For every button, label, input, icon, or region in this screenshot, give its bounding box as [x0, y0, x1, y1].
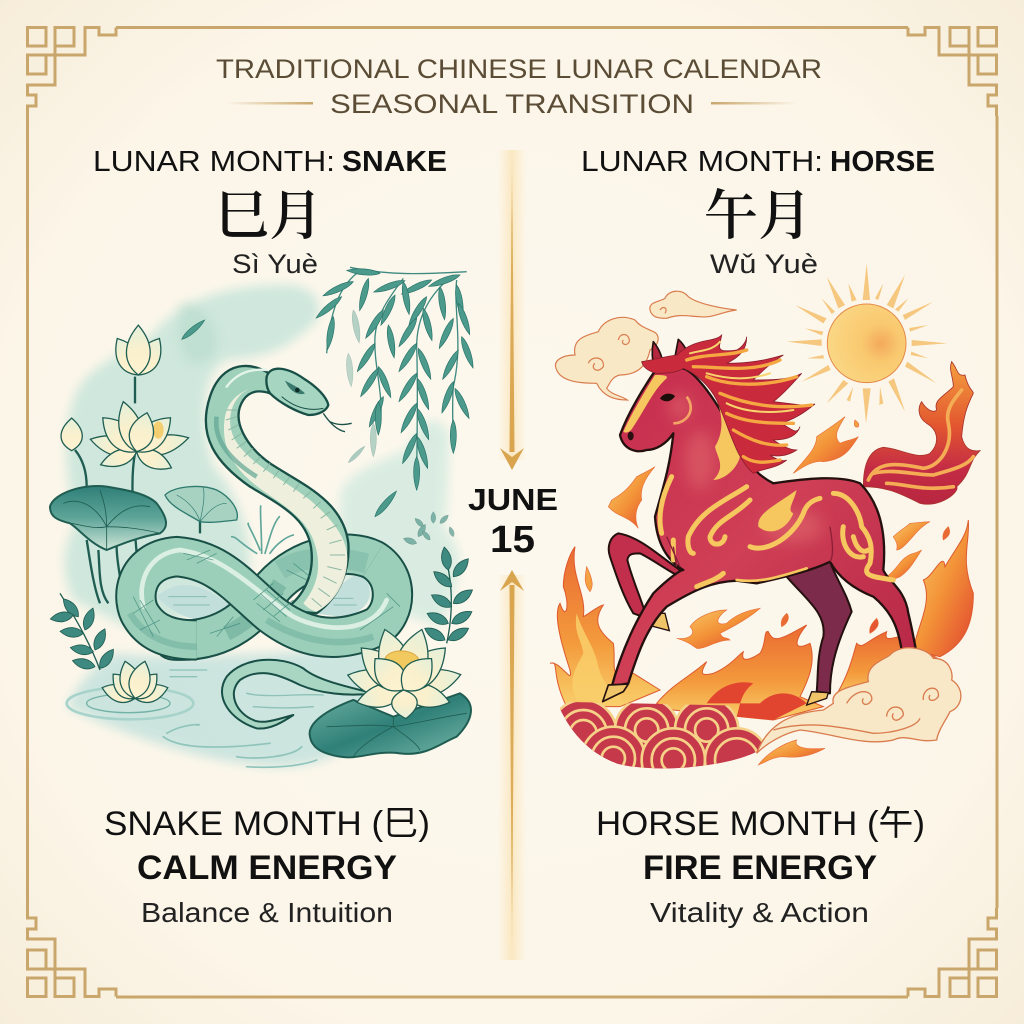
sun	[787, 263, 947, 423]
snake tail	[222, 660, 373, 729]
left lotus plants	[50, 325, 237, 603]
near hoof	[603, 684, 628, 702]
bottom right cloud	[757, 648, 961, 753]
clouds upper	[555, 291, 737, 400]
ears	[652, 339, 690, 369]
date label: JUNE	[468, 482, 558, 517]
far hoof	[807, 692, 828, 705]
snake neck and head	[206, 366, 352, 613]
snake month header: 巳月	[215, 173, 323, 250]
side bud	[61, 418, 82, 451]
snake month caption: SNAKE MONTH (巳)	[104, 805, 430, 843]
wave pattern	[560, 702, 763, 768]
far hind leg	[787, 562, 852, 693]
horse month header	[581, 146, 935, 279]
raised hoof	[652, 613, 669, 631]
nostril	[628, 432, 634, 440]
small lily leaf	[165, 486, 237, 522]
small floating lotus	[100, 659, 170, 706]
date label	[468, 482, 558, 561]
lotus bud top	[108, 325, 169, 381]
snake month header	[93, 146, 447, 279]
body light patches	[668, 393, 823, 543]
snake month caption: Balance & Intuition	[141, 897, 393, 928]
eye	[660, 394, 675, 401]
illustration: snake and lotus pond	[50, 267, 476, 767]
horse month header: HORSE	[830, 146, 935, 178]
water ripples	[67, 670, 323, 767]
date label: 15	[490, 519, 535, 561]
belly scale lines	[226, 410, 345, 607]
large lotus	[344, 625, 464, 720]
upper lotus flower	[88, 399, 191, 476]
fire ground right	[833, 632, 940, 700]
horse blaze	[623, 375, 667, 433]
center timeline arrows	[498, 148, 526, 962]
leaf sprigs	[50, 512, 475, 671]
fire tall right	[913, 520, 973, 657]
snake month caption: CALM ENERGY	[137, 849, 397, 887]
horse month caption: HORSE MONTH (午)	[596, 805, 925, 843]
gold body flames	[660, 477, 893, 587]
large lily pad	[310, 693, 471, 757]
horse tail	[863, 362, 980, 504]
pond inside loops	[157, 573, 370, 620]
illustration: fire horse and sun	[550, 263, 980, 792]
horse month header: Wǔ Yuè	[710, 249, 818, 279]
horse month caption: Vitality & Action	[650, 897, 869, 928]
snake month header: Sì Yuè	[232, 249, 318, 279]
snake month caption	[104, 805, 430, 928]
jaw	[673, 397, 691, 423]
title	[216, 54, 822, 119]
grass tuft	[232, 506, 293, 553]
title: TRADITIONAL CHINESE LUNAR CALENDAR	[216, 54, 822, 84]
horse month header: 午月	[704, 173, 812, 250]
horse body	[603, 339, 916, 702]
snake head	[266, 369, 328, 415]
floating flames	[585, 417, 950, 765]
snake front strand	[130, 550, 392, 647]
snake back strand	[173, 554, 373, 640]
snake month header: SNAKE	[342, 146, 447, 178]
pond line details	[168, 597, 357, 605]
snake scales hatching	[133, 550, 400, 637]
raised front leg	[609, 533, 680, 618]
gold neck stripe	[707, 383, 740, 480]
snake month header: LUNAR MONTH:	[93, 146, 335, 178]
horse month caption	[596, 805, 925, 928]
watercolor wash	[64, 285, 459, 767]
fire ground left	[550, 547, 660, 707]
body folds	[667, 527, 832, 567]
large lily leaf	[50, 486, 166, 550]
title: SEASONAL TRANSITION	[330, 89, 694, 119]
fire embers	[707, 682, 807, 720]
horse month caption: FIRE ENERGY	[643, 849, 877, 887]
willow branches	[180, 267, 476, 519]
fire ground middle	[657, 625, 823, 720]
horse month header: LUNAR MONTH:	[581, 146, 823, 178]
horse mane	[642, 335, 815, 473]
